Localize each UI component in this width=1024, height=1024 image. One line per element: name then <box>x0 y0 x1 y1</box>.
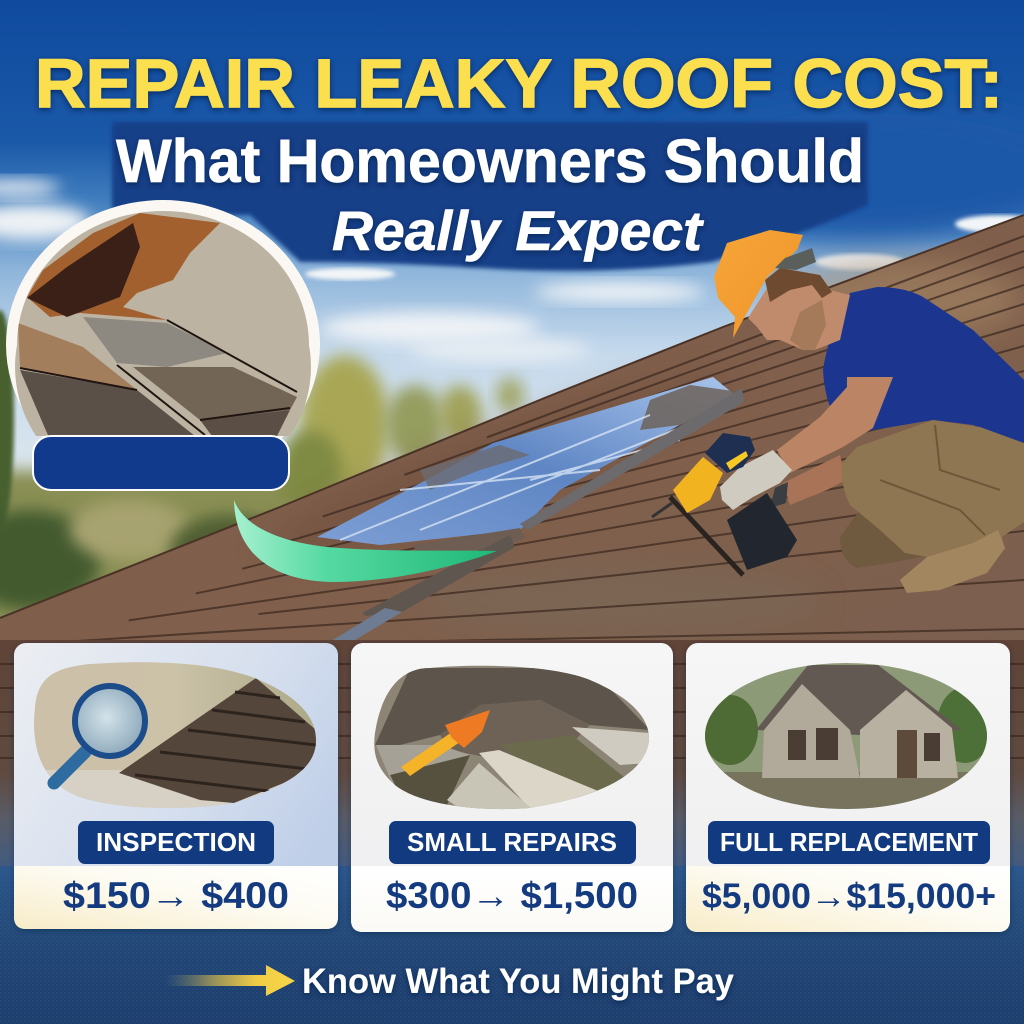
glove <box>720 450 792 510</box>
shirt <box>823 287 1024 445</box>
damaged panel patch on the roof <box>317 377 744 640</box>
far arm <box>783 455 846 505</box>
bottom denim band <box>0 866 1024 1024</box>
hard hat <box>714 230 803 338</box>
worker <box>652 230 1024 593</box>
card: full replacement <box>686 643 1010 932</box>
footer call to action: Know What You Might Pay <box>302 962 735 1001</box>
boot <box>900 530 1005 593</box>
full replacement price <box>686 866 1010 932</box>
inspection label <box>78 821 274 864</box>
trousers <box>842 420 1024 560</box>
card: inspection <box>14 643 338 929</box>
green curved arrow <box>234 500 497 582</box>
inspection price <box>14 866 338 929</box>
head and neck <box>748 268 850 350</box>
icon: magnifying glass <box>54 686 145 783</box>
beard <box>790 300 826 350</box>
small repairs price <box>351 866 673 932</box>
title: Really Expect <box>332 199 704 262</box>
small repairs price: $300→ $1,500 <box>386 875 638 916</box>
inspection label: INSPECTION <box>96 827 256 857</box>
arrow: yellow <box>165 965 295 996</box>
far wrist glove <box>770 482 788 508</box>
icon: hammer <box>401 710 490 776</box>
hair <box>765 268 832 302</box>
clouds <box>0 179 1024 362</box>
title: REPAIR LEAKY ROOF COST: <box>35 45 1003 122</box>
inspection price: $150→ $400 <box>63 875 289 916</box>
roof <box>0 215 1024 650</box>
sky background <box>0 0 1024 640</box>
title <box>35 45 1003 262</box>
full replacement price: $5,000→$15,000+ <box>702 877 996 916</box>
full replacement label: FULL REPLACEMENT <box>720 827 978 857</box>
card: small repairs <box>351 643 673 932</box>
trees <box>0 310 524 630</box>
small repairs label <box>389 821 636 864</box>
inset label bar <box>33 436 289 490</box>
full replacement photo <box>700 660 1000 812</box>
nail gun <box>652 433 797 575</box>
small repairs label: SMALL REPAIRS <box>407 827 617 857</box>
under-card roof strip <box>0 640 1024 880</box>
circular inset: roof damage <box>0 200 330 440</box>
inspection photo <box>34 662 316 808</box>
title banner <box>112 122 868 271</box>
title: What Homeowners Should <box>116 127 864 195</box>
full replacement label <box>708 821 990 864</box>
near arm <box>777 377 893 473</box>
small repairs photo <box>374 666 649 810</box>
far lower leg <box>840 500 930 568</box>
